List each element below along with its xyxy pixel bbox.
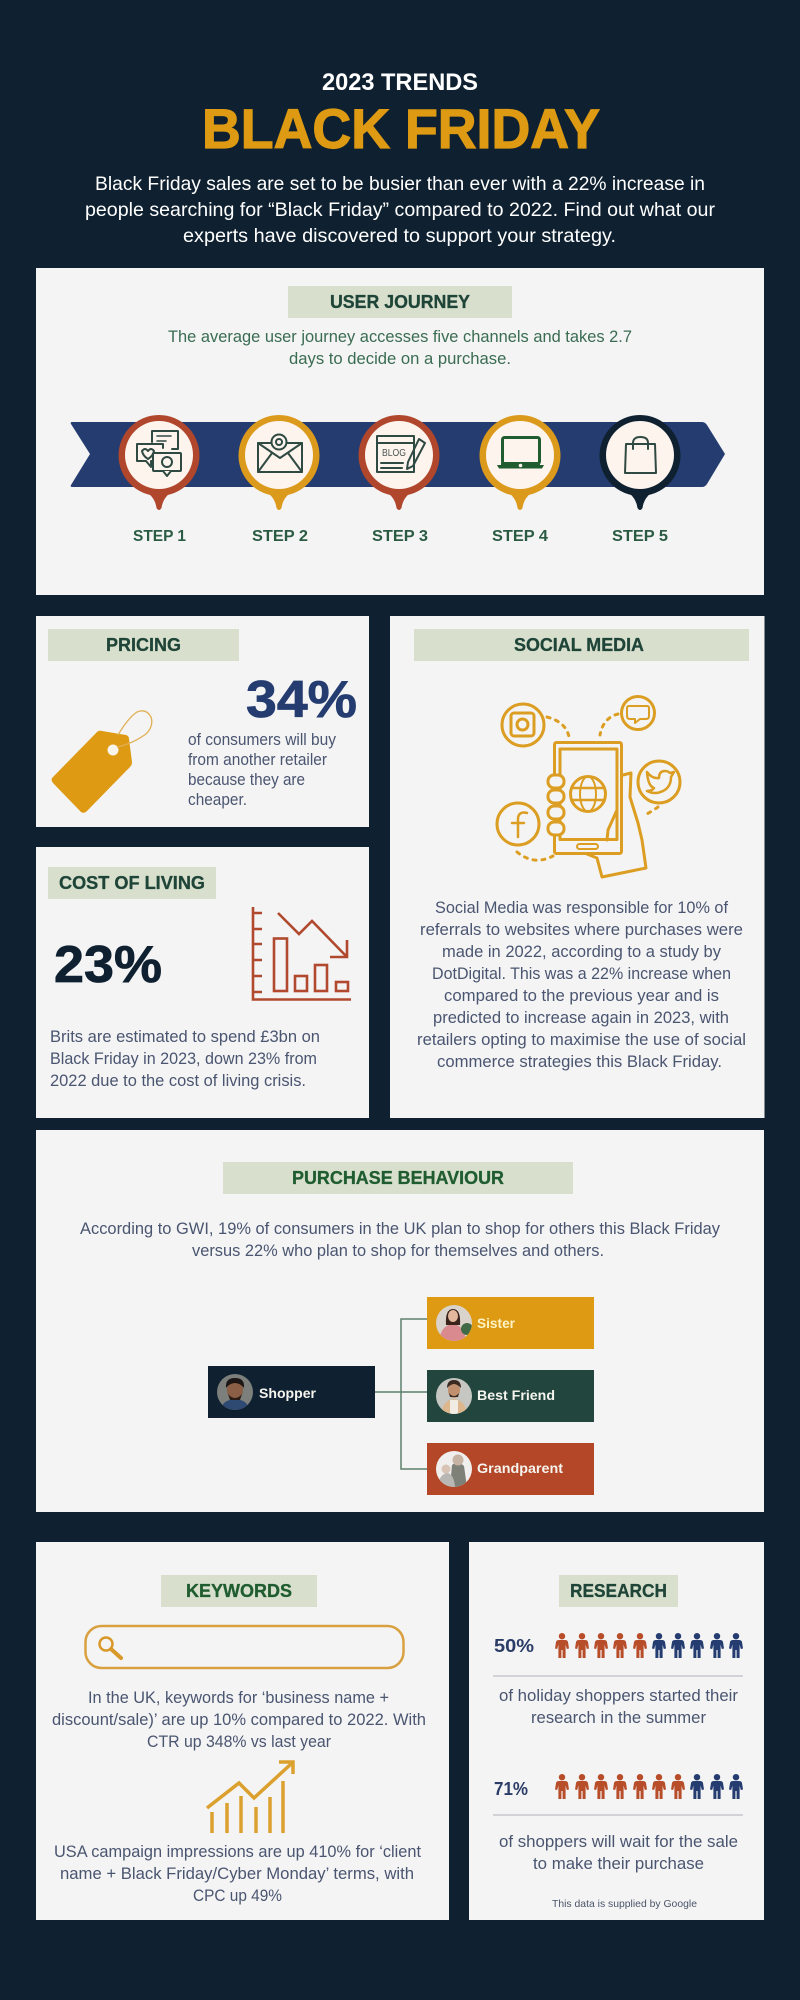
user journey description: days to decide on a purchase. bbox=[289, 350, 511, 368]
USA campaign description: CPC up 49% bbox=[193, 1887, 282, 1905]
heading: cost of living: COST OF LIVING bbox=[59, 872, 205, 893]
purchase behaviour description: According to GWI, 19% of consumers in the UK plan to shop for others this Black Friday bbox=[80, 1220, 721, 1238]
avatar: grandparent bbox=[436, 1451, 472, 1487]
intro text: experts have discovered to support your strategy. bbox=[183, 225, 616, 247]
pictogram: 50 percent bbox=[555, 1633, 743, 1658]
intro text: people searching for “Black Friday” compared to 2022. Find out what our bbox=[85, 199, 716, 221]
box: best friend bbox=[427, 1370, 594, 1422]
title: Black Friday: BLACK FRIDAY bbox=[202, 97, 600, 160]
intro text bbox=[85, 173, 716, 247]
heading: user journey: USER JOURNEY bbox=[330, 291, 471, 312]
heading: research bbox=[559, 1575, 678, 1607]
intro text: Black Friday sales are set to be busier than ever with a 22% increase in bbox=[95, 173, 705, 195]
heading: purchase behaviour: PURCHASE BEHAVIOUR bbox=[292, 1167, 504, 1188]
cost of living description: 2022 due to the cost of living crisis. bbox=[50, 1072, 306, 1090]
50 percent description bbox=[499, 1687, 739, 1727]
heading: research: RESEARCH bbox=[570, 1580, 667, 1601]
search bar bbox=[86, 1626, 404, 1668]
purchase behaviour description: versus 22% who plan to shop for themselves and others. bbox=[192, 1242, 604, 1260]
panel: purchase behaviour bbox=[36, 1130, 764, 1512]
pricing description: from another retailer bbox=[188, 751, 327, 769]
cost of living description: Brits are estimated to spend £3bn on bbox=[50, 1028, 320, 1046]
step 1 pin bbox=[118, 415, 200, 510]
icon: chat bubbles bbox=[137, 431, 181, 476]
heading: purchase behaviour bbox=[223, 1162, 573, 1194]
pricing description bbox=[188, 731, 337, 809]
social media description bbox=[417, 899, 746, 1071]
step labels: STEP 1 bbox=[133, 528, 186, 545]
step 4 pin bbox=[480, 415, 560, 510]
panel: cost of living bbox=[36, 847, 369, 1118]
social media description: DotDigital. This was a 22% increase when bbox=[432, 965, 731, 983]
heading: social media bbox=[414, 629, 749, 661]
social media description: referrals to websites where purchases were bbox=[420, 921, 743, 939]
pricing description: cheaper. bbox=[188, 791, 247, 809]
user journey description bbox=[168, 328, 632, 368]
icon: price tag bbox=[52, 711, 152, 813]
box: shopper bbox=[208, 1366, 375, 1418]
social media description: made in 2022, according to a study by bbox=[442, 943, 722, 961]
UK keywords description: discount/sale)’ are up 10% compared to 2022. With bbox=[52, 1711, 426, 1729]
avatar: shopper bbox=[217, 1374, 253, 1410]
USA campaign description: USA campaign impressions are up 410% for ‘client bbox=[54, 1843, 421, 1861]
71 percent description: to make their purchase bbox=[533, 1855, 704, 1873]
pictogram: 71 percent bbox=[555, 1774, 743, 1799]
stat: 71%: 71% bbox=[494, 1779, 528, 1799]
stat: 34%: 34% bbox=[246, 671, 357, 729]
panel: social media bbox=[390, 616, 764, 1118]
icon: magnifying glass bbox=[100, 1638, 121, 1658]
71 percent description bbox=[499, 1833, 738, 1873]
71 percent description: of shoppers will wait for the sale bbox=[499, 1833, 738, 1851]
social media description: commerce strategies this Black Friday. bbox=[437, 1053, 722, 1071]
icon: phone with social networks bbox=[497, 696, 680, 877]
avatar: best friend bbox=[436, 1378, 472, 1414]
heading: keywords bbox=[161, 1575, 317, 1607]
USA campaign description: name + Black Friday/Cyber Monday’ terms, with bbox=[60, 1865, 414, 1883]
box: shopper: Shopper bbox=[259, 1386, 317, 1401]
icon: envelope bbox=[258, 434, 302, 472]
avatar: sister bbox=[436, 1305, 473, 1341]
panel: keywords bbox=[36, 1542, 449, 1920]
social media description: retailers opting to maximise the use of social bbox=[417, 1031, 746, 1049]
step labels: STEP 5 bbox=[612, 528, 668, 545]
pricing description: because they are bbox=[188, 771, 305, 789]
step labels: STEP 2 bbox=[252, 528, 308, 545]
step labels: STEP 3 bbox=[372, 528, 428, 545]
subtitle: 2023 trends: 2023 TRENDS bbox=[322, 69, 478, 96]
panel: user journey bbox=[36, 268, 764, 595]
header block bbox=[85, 69, 716, 247]
pricing description: of consumers will buy bbox=[188, 731, 337, 749]
panel: research bbox=[469, 1542, 764, 1920]
box: sister: Sister bbox=[477, 1316, 516, 1331]
heading: keywords: KEYWORDS bbox=[186, 1580, 292, 1601]
heading: cost of living bbox=[48, 867, 216, 899]
purchase behaviour description bbox=[80, 1220, 721, 1260]
stat: 50%: 50% bbox=[494, 1636, 534, 1656]
step 3 pin bbox=[358, 415, 440, 510]
source note: This data is supplied by Google bbox=[552, 1898, 697, 1910]
step labels bbox=[133, 528, 668, 545]
social media description: predicted to increase again in 2023, with bbox=[433, 1009, 729, 1027]
50 percent description: research in the summer bbox=[531, 1709, 706, 1727]
icon: blog page and pencil: BLOG bbox=[382, 448, 406, 459]
UK keywords description: CTR up 348% vs last year bbox=[147, 1733, 331, 1751]
icon: rising chart bbox=[207, 1762, 293, 1833]
panel: pricing bbox=[36, 616, 369, 827]
step 5 pin bbox=[600, 415, 680, 510]
box: sister bbox=[427, 1297, 594, 1349]
icon: laptop bbox=[497, 438, 544, 468]
stat: 23%: 23% bbox=[54, 936, 162, 994]
box: grandparent bbox=[427, 1443, 594, 1495]
step labels: STEP 4 bbox=[492, 528, 548, 545]
heading: pricing bbox=[48, 629, 239, 661]
step 2 pin bbox=[238, 415, 320, 510]
UK keywords description bbox=[52, 1689, 426, 1751]
connector lines bbox=[375, 1319, 427, 1469]
social media description: Social Media was responsible for 10% of bbox=[435, 899, 728, 917]
50 percent description: of holiday shoppers started their bbox=[499, 1687, 739, 1705]
heading: pricing: PRICING bbox=[106, 634, 181, 655]
social media description: compared to the previous year and is bbox=[444, 987, 719, 1005]
user journey description: The average user journey accesses five channels and takes 2.7 bbox=[168, 328, 632, 346]
heading: social media: SOCIAL MEDIA bbox=[514, 634, 644, 655]
cost of living description bbox=[50, 1028, 320, 1090]
icon: shopping bag bbox=[625, 437, 656, 473]
heading: user journey bbox=[288, 286, 512, 318]
journey ribbon arrow bbox=[71, 422, 725, 487]
box: best friend: Best Friend bbox=[477, 1388, 555, 1403]
cost of living description: Black Friday in 2023, down 23% from bbox=[50, 1050, 317, 1068]
UK keywords description: In the UK, keywords for ‘business name + bbox=[88, 1689, 389, 1707]
icon: falling bar chart bbox=[253, 907, 351, 1000]
USA campaign description bbox=[54, 1843, 421, 1905]
box: grandparent: Grandparent bbox=[477, 1461, 564, 1476]
